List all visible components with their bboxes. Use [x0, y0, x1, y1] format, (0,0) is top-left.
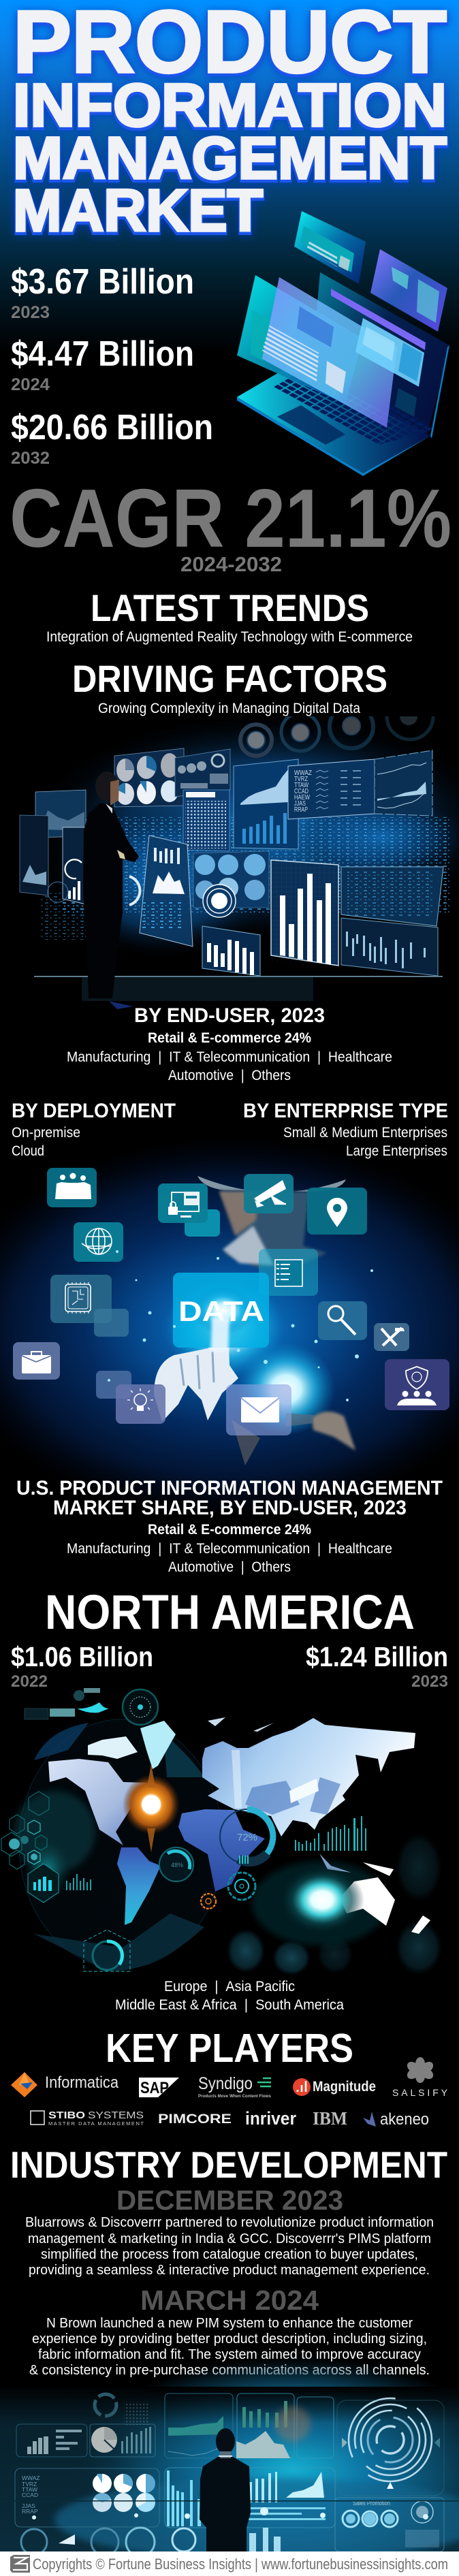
lower left table panel: RRAP	[22, 2508, 38, 2515]
development: March 2024	[29, 2285, 430, 2378]
lower left table panel: TVRZ	[22, 2481, 37, 2487]
development: December 2023: management & marketing in India & GCC. Discoverrr's PIMS platform	[28, 2231, 431, 2246]
title	[13, 0, 447, 244]
development: March 2024: & consistency in pre-purchase communications across all channels.	[29, 2362, 430, 2378]
continent: Arctic islands	[88, 1736, 138, 1759]
icon tile: light bulb	[116, 1384, 165, 1424]
segment: by end-user	[67, 1004, 392, 1083]
logo: Salsify	[392, 2057, 448, 2098]
left bars and line	[66, 1874, 91, 1890]
continent: Greenland	[140, 1721, 176, 1769]
lower left table panel: TTAW	[22, 2486, 37, 2493]
stat: 2024 value: $4.47 Billion	[11, 334, 194, 374]
heading: North America: NORTH AMERICA	[45, 1586, 415, 1640]
segment: by deployment	[12, 1100, 176, 1159]
icon tile: small blank left	[94, 1309, 129, 1337]
segment: by end-user: Retail & E-commerce 24%	[148, 1030, 311, 1046]
ticker table panel: WWAZ	[294, 769, 312, 777]
U.S. market share segments: Manufacturing | IT & Telecommunication | Healthcare	[67, 1541, 392, 1557]
area chart panel	[234, 759, 298, 849]
segment: by deployment: Cloud	[12, 1143, 44, 1159]
logo: SAP: SAP	[140, 2079, 169, 2097]
businessman silhouette	[83, 772, 139, 1009]
dot matrix panel	[183, 790, 230, 851]
sparkle particles	[108, 1250, 373, 1401]
logo: Informatica: Informatica	[45, 2073, 119, 2092]
title: MARKET	[13, 178, 263, 244]
stat: 2032 value: $20.66 Billion	[11, 408, 213, 447]
dark circuit panel	[341, 867, 443, 926]
continent: New Zealand	[411, 1915, 430, 1934]
icon tile: magnifier	[318, 1301, 367, 1340]
orange glow marker	[123, 1764, 180, 1852]
reflective floor	[34, 976, 443, 1001]
bokeh lights	[227, 1833, 442, 1975]
world bar chart	[295, 1816, 366, 1851]
stat: 2024 value: 2024	[11, 375, 50, 394]
stat: 2032 value	[11, 408, 213, 468]
globe	[14, 1719, 223, 1971]
continent: Africa	[178, 1809, 265, 1892]
icon tile: shield team	[385, 1359, 449, 1410]
ticker table panel: CCAD	[294, 788, 308, 795]
U.S. market share segments: Automotive | Others	[168, 1559, 291, 1575]
north islands	[208, 1717, 274, 1732]
development: March 2024: fabric information and fit. The system aimed to improve accuracy	[38, 2347, 422, 2362]
icon tile: circuit chip	[50, 1275, 112, 1323]
lower dials and lights	[0, 2500, 459, 2556]
title: MANAGEMENT	[13, 125, 447, 191]
pie chart panel	[114, 748, 184, 807]
concentric radar rings	[337, 2398, 444, 2496]
other regions list: Europe | Asia Pacific	[164, 1979, 295, 1994]
bottom dashed hexagon gauge	[84, 1930, 130, 1971]
logo: Fortune Business Insights	[10, 2555, 30, 2573]
ticker table panel: RRAP	[294, 806, 308, 814]
logo: Syndigo	[198, 2074, 272, 2099]
development: December 2023: simplified the process from catalogue creation to buyer updates,	[41, 2246, 418, 2262]
segment: by end-user: Automotive | Others	[168, 1068, 291, 1083]
development: March 2024: N Brown launched a new PIM system to enhance the customer	[46, 2315, 413, 2331]
development: December 2023: DECEMBER 2023	[116, 2184, 343, 2216]
gauge 72 percent	[220, 1809, 274, 1864]
U.S. market share segments	[67, 1522, 392, 1575]
cyan gear	[228, 1873, 255, 1900]
logo: Informatica	[11, 2072, 119, 2097]
stat: North America 2023	[306, 1641, 448, 1691]
logo: Stibo Systems: SYSTEMS	[88, 2110, 144, 2121]
continent: Indonesia	[319, 1854, 351, 1873]
ticker table panel	[288, 759, 375, 819]
segment: by deployment: BY DEPLOYMENT	[12, 1100, 176, 1122]
logo: Stibo Systems	[31, 2110, 144, 2127]
highlight window	[289, 1779, 319, 1803]
continent: Eurasia	[202, 1718, 415, 1836]
lower right sales panel	[335, 2498, 444, 2551]
logo: akeneo	[363, 2110, 429, 2129]
development: December 2023	[25, 2184, 434, 2278]
image: digital world map	[1, 1688, 442, 1975]
glowing light near Australia	[280, 1866, 364, 1934]
illustration: laptop with floating screens	[237, 211, 449, 476]
icon tile: envelope	[226, 1384, 291, 1435]
segment: by end-user: Manufacturing | IT & Telecommunication | Healthcare	[67, 1049, 392, 1065]
icon tile: small blank lower	[96, 1371, 131, 1399]
lower left table panel: CCAD	[22, 2492, 38, 2498]
ticker table panel: JJAS	[294, 800, 306, 808]
development: March 2024: MARCH 2024	[140, 2285, 319, 2316]
heading: U.S. market share: U.S. PRODUCT INFORMATION MANAGEMENT	[16, 1477, 443, 1499]
stat: 2024 value	[11, 334, 194, 394]
lower left table panel: WWAZ	[22, 2475, 40, 2481]
stat: North America 2022	[11, 1641, 153, 1691]
image: businessman viewing data dashboards	[20, 693, 459, 1009]
centre bar panels	[165, 2468, 335, 2528]
icon tile: briefcase	[13, 1342, 60, 1380]
development: December 2023: Bluarrows & Discoverrr partnered to revolutionize product information	[25, 2214, 434, 2230]
lower left table panel: JJAS	[22, 2502, 35, 2509]
gauge rings	[238, 716, 434, 758]
text: driving factors: Growing Complexity in Managing Digital Data	[98, 701, 360, 716]
icon tile: tools	[374, 1323, 409, 1351]
stat: North America 2023: 2023	[411, 1672, 448, 1691]
segment: by enterprise type	[243, 1100, 448, 1159]
ticker table panel: HAEW	[294, 794, 310, 801]
continent: South America	[117, 1847, 161, 1925]
logo: Syndigo: Products Move When Content Flows	[198, 2095, 272, 2099]
logo: Stibo Systems: MASTER DATA MANAGEMENT	[48, 2120, 144, 2127]
segment: by enterprise type: Small & Medium Enterprises	[283, 1125, 447, 1141]
logo: Magnitude: Magnitude	[313, 2079, 376, 2095]
icon tile: DATA: DATA	[178, 1295, 264, 1327]
centre layered panel	[129, 836, 193, 947]
white pies	[93, 2474, 155, 2512]
left layered panels	[20, 790, 92, 906]
stat: 2032 value: 2032	[11, 449, 50, 468]
image: man in hat touching data icons	[0, 1137, 459, 1518]
Asia highlight panels	[232, 1750, 341, 1815]
continent: Australia	[340, 1877, 395, 1926]
ticker table panel: TTAW	[294, 782, 308, 789]
hat and face	[197, 1176, 346, 1268]
heading: latest trends: LATEST TRENDS	[91, 586, 369, 629]
lower left table panel	[15, 2468, 159, 2527]
heading: U.S. market share	[16, 1477, 443, 1519]
people metrics panel	[175, 749, 230, 797]
icon tile: checklist	[259, 1249, 318, 1296]
lower bar chart panel	[271, 860, 338, 966]
development: March 2024: experience by providing better product description, including sizing,	[32, 2331, 427, 2347]
glow centres	[165, 1277, 335, 1435]
orange gear	[201, 1894, 216, 1909]
footer bar	[0, 2551, 459, 2576]
development: December 2023: providing a seamless & interactive product management experience.	[29, 2262, 430, 2278]
heading: U.S. market share: MARKET SHARE, BY END-USER, 2023	[53, 1497, 407, 1519]
CAGR period: 2024-2032	[180, 552, 282, 576]
logo: inriver: inriver	[245, 2108, 296, 2129]
other regions list	[115, 1979, 344, 2013]
continent: New Guinea	[363, 1862, 394, 1876]
image: businessman facing dashboard wall	[0, 2356, 459, 2576]
upper centre charts	[165, 2394, 334, 2458]
ticker table panel: TVRZ	[294, 776, 308, 783]
icon tile: people	[47, 1168, 97, 1207]
gauge 48 percent: 48%	[171, 1862, 183, 1869]
logo: IBM: IBM	[313, 2108, 347, 2129]
stat: North America 2022: 2022	[11, 1672, 48, 1691]
segment: by end-user: BY END-USER, 2023	[134, 1004, 325, 1027]
mini bar panel	[202, 926, 260, 976]
tech hexagons	[1, 1792, 49, 1869]
pointing hand	[154, 1322, 355, 1465]
logo: Pimcore: PIMCORE	[158, 2112, 232, 2127]
segment: by enterprise type: Large Enterprises	[346, 1143, 447, 1159]
line charts panel	[375, 750, 432, 816]
logo: Stibo Systems: STIBO	[48, 2110, 85, 2121]
title: INFORMATION	[13, 71, 447, 139]
text: latest trends: Integration of Augmented Reality Technology with E-commerce	[46, 629, 413, 645]
logo: akeneo: akeneo	[380, 2110, 429, 2129]
logo: Syndigo: Syndigo	[198, 2074, 253, 2093]
small pies and rings panel	[193, 851, 269, 917]
stat: 2023 value: $3.67 Billion	[11, 262, 194, 302]
heading: key players: KEY PLAYERS	[106, 2026, 353, 2071]
stat: North America 2022: $1.06 Billion	[11, 1641, 153, 1672]
candlestick panel	[341, 918, 438, 976]
icon tile: secure monitor	[158, 1183, 208, 1223]
logo: Salsify: SALSIFY	[392, 2087, 448, 2098]
stat: 2023 value	[11, 262, 194, 322]
other regions list: Middle East & Africa | South America	[115, 1997, 344, 2013]
continent: North America	[48, 1759, 146, 1845]
lower right sales panel: Sales Promotion	[353, 2500, 390, 2507]
bar hexagon	[28, 1864, 59, 1903]
U.S. market share segments: Retail & E-commerce 24%	[148, 1522, 311, 1538]
businessman seen from behind	[200, 2428, 251, 2551]
gauge 48 percent	[159, 1847, 193, 1881]
upper left widgets	[16, 2394, 155, 2457]
icon tile: DATA	[173, 1273, 269, 1352]
stat: 2023 value: 2023	[11, 303, 50, 322]
logo: Magnitude	[293, 2078, 376, 2096]
gauge 72 percent: 72%	[237, 1832, 257, 1843]
header gradient background	[0, 0, 459, 354]
icon tile: camera	[244, 1174, 294, 1213]
icon tile: small blank	[185, 1209, 220, 1237]
icon tile: globe	[74, 1222, 123, 1262]
icon tile: location pin	[307, 1188, 367, 1235]
top mini charts	[25, 1688, 109, 1719]
heading: driving factors: DRIVING FACTORS	[72, 657, 387, 700]
top target ring	[123, 1689, 158, 1725]
segment: by deployment: On-premise	[12, 1125, 80, 1141]
